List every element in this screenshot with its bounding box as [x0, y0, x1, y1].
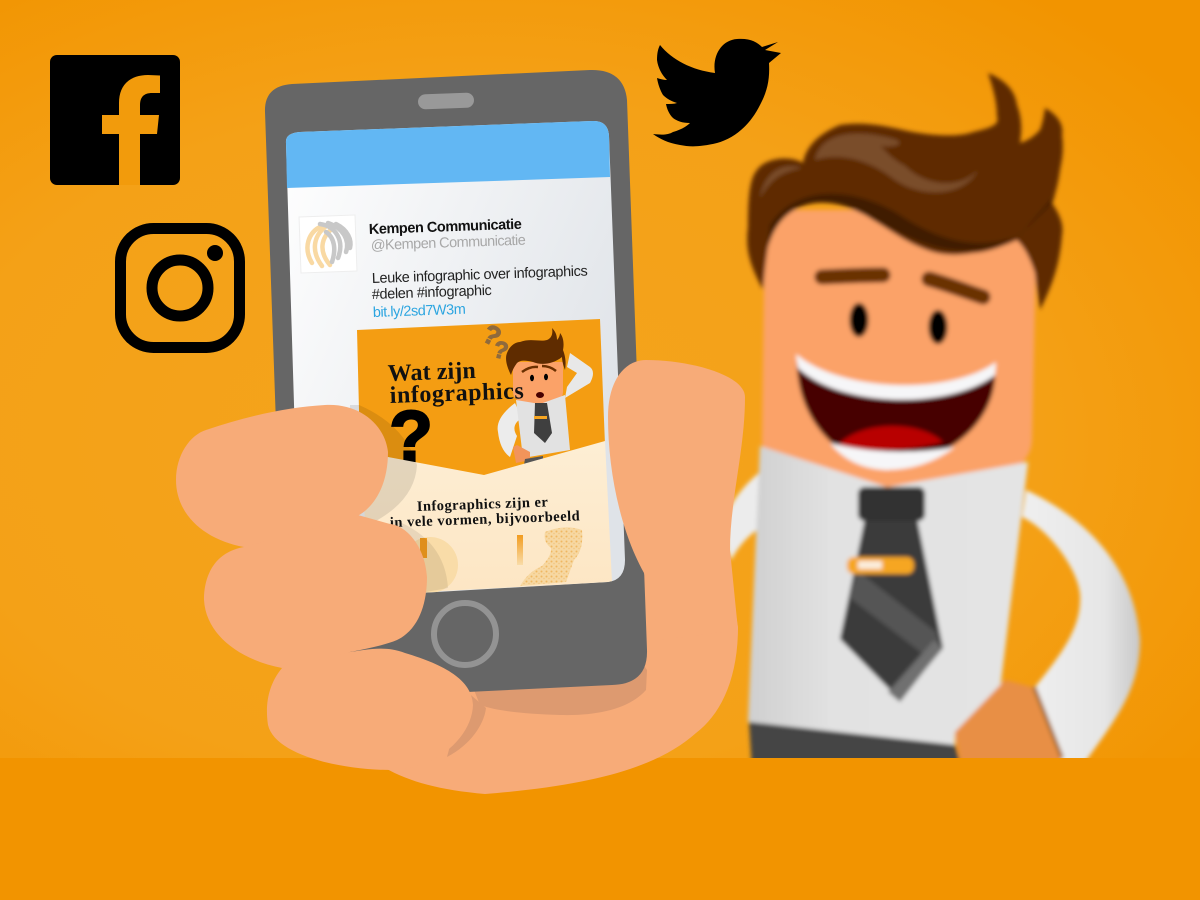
mini title: infographics: [389, 378, 524, 409]
eyes: [850, 303, 948, 344]
tie: [840, 487, 943, 702]
tie clip: [534, 416, 547, 419]
hand: palm behind the phone: [385, 400, 738, 794]
mini orange bar: [420, 538, 427, 558]
tweet line 1: Leuke infographic over infographics: [372, 263, 588, 287]
left arm: [498, 403, 518, 457]
eyebrows: [822, 275, 983, 297]
raised arm: [565, 353, 593, 398]
icon: facebook: [50, 55, 180, 185]
left arm: [726, 472, 760, 560]
orange banner: [357, 319, 605, 476]
small question marks: ?: [490, 336, 511, 366]
mini title: [388, 362, 524, 407]
floor band: [0, 758, 1200, 900]
mini bubble chart: [415, 537, 458, 593]
big question mark: ?: [389, 397, 433, 477]
subtitle: in vele vormen, bijvoorbeeld: [390, 508, 580, 531]
home button: [434, 603, 496, 665]
screen: [286, 121, 625, 600]
mini title: Wat zijn: [387, 358, 476, 387]
hair: [747, 73, 1063, 310]
hand on hip: [955, 680, 1065, 770]
finger shadow on screen: [345, 405, 417, 522]
hand: first finger: [176, 405, 388, 547]
trousers: [749, 722, 962, 770]
small question marks: ?: [478, 318, 506, 353]
handle: @Kempen Communicatie: [371, 233, 526, 254]
small question marks: [484, 325, 508, 359]
mouth: [796, 354, 996, 470]
tweet text: [369, 217, 588, 321]
phone: [265, 70, 647, 700]
subtitle: [390, 497, 580, 527]
blue header: [286, 121, 610, 188]
embedded infographic: [345, 318, 612, 595]
mini hand: [513, 445, 530, 463]
mini trousers: [524, 456, 543, 464]
lower finger shadow on screen: [390, 520, 448, 592]
hand: thumb over phone: [608, 360, 745, 640]
shirt: [748, 446, 1028, 748]
hair: [506, 328, 566, 375]
hand: second finger: [204, 510, 427, 668]
tweet line 2: #delen #infographic: [372, 283, 492, 303]
face: [762, 210, 1037, 492]
finger shadow on palm: [447, 690, 486, 757]
mini confused man: [498, 328, 593, 470]
account name: Kempen Communicatie: [369, 217, 522, 238]
subtitle: Infographics zijn er: [417, 494, 549, 515]
mini bar legend: [517, 535, 523, 565]
hand: third finger: [267, 649, 473, 770]
speaker: [418, 93, 474, 109]
icon: instagram: [120, 228, 240, 348]
tie: [534, 403, 552, 443]
phone body: [265, 70, 647, 700]
profile logo: [299, 215, 357, 273]
tweet link: bit.ly/2sd7W3m: [373, 302, 466, 321]
icon: twitter bird: [653, 39, 781, 146]
cream panel: [360, 441, 612, 592]
phone shadow on palm: [470, 660, 647, 715]
shirt: [516, 395, 570, 458]
character: smiling man in shirt and tie (blurred): [726, 73, 1140, 770]
shirt cuff line: [1034, 687, 1062, 758]
face: [513, 362, 563, 405]
right arm: [1022, 490, 1140, 765]
mini map of the Netherlands: [520, 527, 582, 586]
face features: [522, 366, 556, 398]
